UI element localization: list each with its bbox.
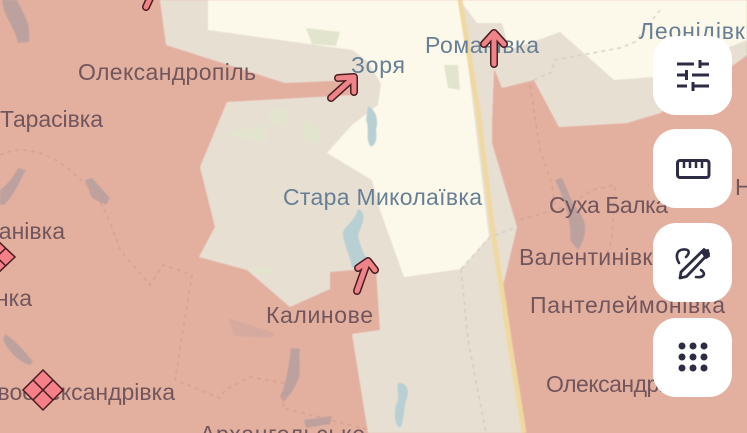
icon: arrow near Зоря <box>331 77 354 98</box>
free area: north <box>460 0 747 80</box>
button: pen <box>653 223 732 302</box>
lakes <box>343 106 408 428</box>
label: Зоря: Зоря <box>351 52 405 78</box>
icon: dots grid <box>678 342 708 372</box>
road <box>460 0 524 433</box>
label: Калинове: Калинове <box>266 302 373 328</box>
icon: sliders <box>677 60 709 91</box>
button: filters <box>653 36 732 115</box>
icon: arrow at top edge <box>146 0 152 7</box>
icon: diamond marker Новоолександрівка <box>23 370 63 410</box>
label: Суха Балка: Суха Балка <box>549 192 668 218</box>
button: grid <box>653 318 732 397</box>
ponds and towns on occupied land <box>0 0 585 428</box>
label: Тарасівка: Тарасівка <box>0 106 103 132</box>
label: Валентинівка: Валентинівка <box>519 244 666 270</box>
icon: pen <box>677 249 709 278</box>
label: Романівка: Романівка <box>425 32 539 58</box>
label: Олександрівка: Олександрівка <box>546 371 698 397</box>
green patches <box>222 28 460 274</box>
contested strip at Романівка <box>477 23 660 127</box>
dashed borders on contested land <box>461 10 660 433</box>
icon: arrow at Калинове <box>357 261 375 291</box>
dashed borders on occupied land <box>0 85 615 430</box>
label: Олександропіль: Олександропіль <box>78 59 256 85</box>
label: Стара Миколаївка: Стара Миколаївка <box>283 184 482 210</box>
contested area: central <box>160 0 747 433</box>
icon: arrow at Романівка <box>484 33 504 64</box>
icon: diamond marker left <box>0 240 15 274</box>
icon: ruler <box>678 160 709 178</box>
label: Пантелеймонівка: Пантелеймонівка <box>530 292 725 318</box>
button: ruler <box>653 129 732 208</box>
free area: centre <box>208 0 489 277</box>
